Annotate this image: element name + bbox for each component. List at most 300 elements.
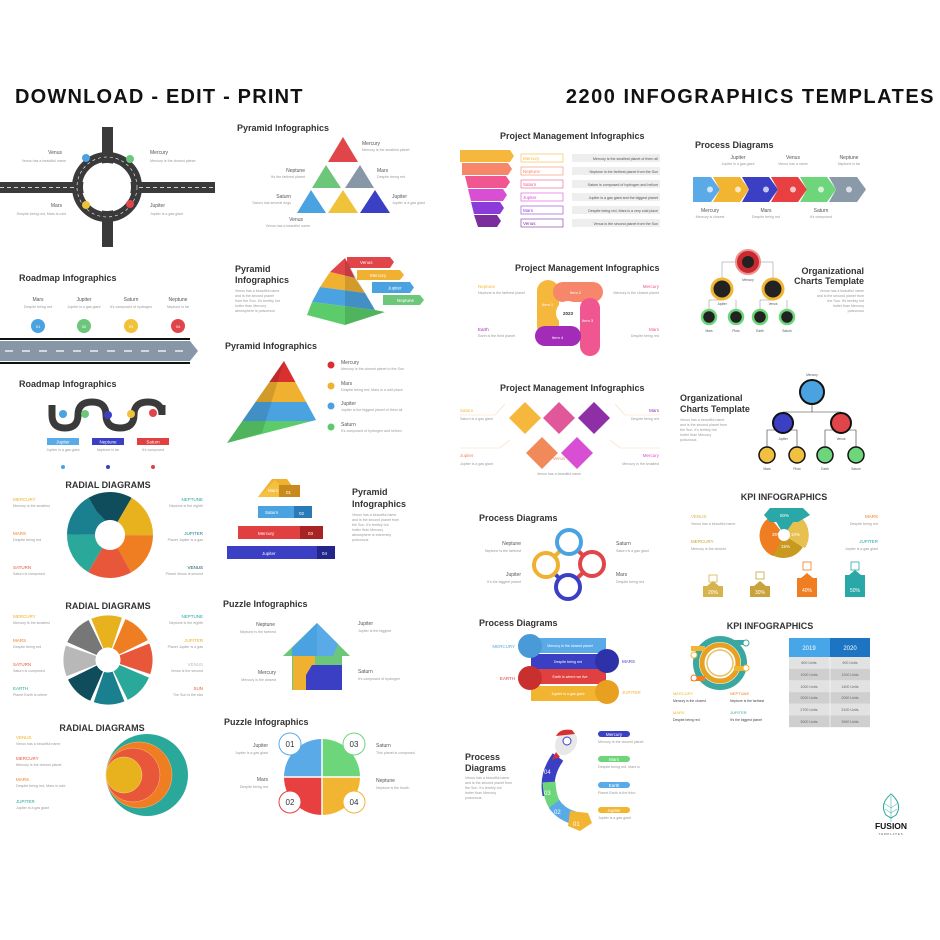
panel: pyramid ribbons stack: 01: [286, 490, 292, 495]
panel: radial diagram 2: Despite being red: [13, 645, 41, 649]
panel: roundabout: Mercury: [150, 150, 169, 156]
panel: KPI 2: 3900 Units: [841, 720, 859, 724]
panel: org chart 2: Saturn: [851, 467, 861, 471]
panel: roadmap 1: 04: [176, 324, 181, 329]
panel: KPI 2: 1400 Units: [841, 685, 859, 689]
panel: process rocket: Earth: [609, 783, 620, 788]
panel: radial diagram 1: NEPTUNE: [181, 497, 203, 502]
panel: puzzle circle: Despite being red: [240, 785, 268, 789]
panel: puzzle house: Mercury is the closest: [241, 678, 276, 682]
panel: pyramid 3D ribbons: from the Sun. It's terribly hot: [235, 299, 280, 303]
panel: org chart 2: Charts Template: [680, 404, 750, 414]
panel: pyramid ribbons stack: Infographics: [352, 499, 406, 509]
panel: org chart 2: Venus: [837, 437, 846, 441]
panel: project management funnel: Neptune: [523, 169, 541, 174]
panel: org chart 1: Pluto: [732, 329, 740, 333]
panel: puzzle house: Puzzle Infographics: [223, 599, 308, 609]
panel: radial diagram 1: Planet Venus is second: [166, 572, 203, 576]
panel: roadmap 1: Mars: [32, 297, 44, 303]
panel: KPI 1: 40%: [802, 588, 813, 594]
panel: puzzle house: It's composed of hydrogen: [358, 677, 400, 681]
panel: radial diagram 2: EARTH: [13, 686, 28, 691]
panel: process rocket: Jupiter: [607, 808, 621, 813]
panel: pyramid 3D ribbons: Jupiter: [388, 286, 402, 290]
panel: radial diagram 2: JUPITER: [184, 638, 204, 643]
panel: pyramid triangles: Saturn has several rings: [252, 201, 291, 205]
panel: project management loop: Despite being red: [631, 334, 659, 338]
panel: pyramid triangles: Jupiter: [392, 194, 407, 200]
panel: process bars: Jupiter is a gas giant: [552, 692, 584, 696]
panel: project management loop: Project Management Infographics: [515, 263, 660, 273]
panel: process rocket: the Sun. It's terribly hot: [465, 786, 502, 790]
panel: process rocket: Process: [465, 752, 500, 762]
panel: project management loop: Item 3: [582, 318, 594, 323]
panel: pyramid triangles: Venus has a beautiful name: [266, 224, 310, 228]
panel: puzzle circle: Jupiter is a gas giant: [235, 751, 268, 755]
panel: radial diagram 2: MERCURY: [13, 614, 36, 619]
panel: process bars: EARTH: [500, 676, 515, 681]
panel: project management funnel: Venus: [523, 221, 536, 226]
panel: process rocket: poisonous: [465, 796, 482, 800]
panel: radial diagram 2: Saturn is composed: [13, 669, 45, 673]
panel: roadmap 1: 03: [129, 324, 134, 329]
panel: roadmap 1: 01: [36, 324, 41, 329]
panel: org chart 2: Venus has a beautiful name: [680, 418, 724, 422]
panel: radial diagram 2: VENUS: [187, 662, 203, 667]
panel: puzzle circle: [224, 717, 415, 815]
panel: project management loop: Neptune is the farthest planet: [478, 291, 525, 295]
panel: pyramid 3D bands: Despite being red, Mars is a cold place: [341, 388, 403, 392]
panel: process rocket: Planet Earth is the third: [598, 791, 635, 795]
panel: org chart 1: the Sun. It's terribly hot: [827, 299, 864, 303]
panel: KPI 1: 20%: [708, 590, 719, 596]
panel: pyramid 3D bands: It's composed of hydrogen and helium: [341, 429, 402, 433]
panel: process circles: Jupiter: [506, 572, 521, 578]
panel: KPI 1: Jupiter is a gas giant: [845, 547, 878, 551]
panel: puzzle circle: 03: [350, 740, 359, 749]
panel: radial diagram 2: [13, 601, 204, 697]
panel: puzzle house: Neptune is the farthest: [240, 630, 276, 634]
panel: pyramid ribbons stack: Jupiter: [262, 551, 276, 556]
panel: roadmap 1: 02: [82, 324, 87, 329]
panel: pyramid 3D bands: [220, 341, 404, 446]
panel: pyramid ribbons stack: and is the second planet from: [352, 518, 399, 522]
panel: project management loop: Item 4: [552, 335, 564, 340]
panel: pyramid ribbons stack: atmosphere is extremely: [352, 533, 391, 537]
panel: pyramid triangles: Mars: [377, 168, 389, 174]
panel: roundabout: Jupiter is a gas giant: [150, 212, 183, 216]
panel: radial diagram 3: Venus has a beautiful name: [16, 742, 60, 746]
panel: roadmap 2: Roadmap Infographics: [19, 379, 117, 389]
panel: org chart 2: and is the second planet from: [680, 423, 727, 427]
panel: pyramid triangles: Mercury is the smallest planet: [362, 148, 410, 152]
panel: radial diagram 1: Planet Jupiter is a gas: [168, 538, 203, 542]
panel: process circles: Saturn is a gas giant: [616, 549, 649, 553]
panel: project management funnel: Jupiter is a gas giant and the biggest planet: [589, 196, 658, 200]
panel: pyramid 3D bands: Mercury is the closest planet to the Sun: [341, 367, 404, 371]
panel: radial diagram 2: Neptune is the eighth: [169, 621, 203, 625]
panel: pyramid ribbons stack: Mars: [268, 488, 279, 493]
panel: org chart 1: Saturn: [782, 329, 792, 333]
panel: KPI 2: 3000 Units: [800, 720, 818, 724]
panel: KPI 1: JUPITER: [859, 539, 879, 544]
panel: process circles: Neptune: [502, 541, 521, 547]
panel: KPI 2: 1000 Units: [800, 685, 818, 689]
panel: org chart 2: Jupiter: [778, 437, 789, 441]
panel: project management funnel: Mercury: [523, 156, 540, 161]
panel: org chart 2: the Sun. It's terribly hot: [680, 428, 717, 432]
panel: process rocket: [465, 727, 644, 831]
panel: radial diagram 2: MARS: [13, 638, 26, 643]
panel: pyramid ribbons stack: 04: [322, 551, 328, 556]
panel: org chart 1: Earth: [756, 329, 764, 333]
panel: KPI 1: Venus has a beautiful name: [691, 522, 735, 526]
panel: pyramid 3D bands: Pyramid Infographics: [225, 341, 317, 351]
panel: roadmap 2: Jupiter: [56, 440, 70, 444]
panel: roundabout: Jupiter: [150, 203, 165, 209]
panel: process rocket: Mars: [609, 757, 620, 762]
panel: KPI 1: 35%: [772, 532, 781, 537]
panel: radial diagram 2: Planet Earth is where: [13, 693, 47, 697]
panel: puzzle circle: Saturn: [376, 743, 391, 749]
panel: process circles: Despite being red: [616, 580, 644, 584]
panel: roadmap 1: Neptune: [169, 297, 188, 303]
header: right: 2200 INFOGRAPHICS TEMPLATES: [566, 86, 935, 108]
panel: project management loop: Mercury: [643, 284, 660, 289]
panel: pyramid triangles: Mercury: [362, 141, 381, 147]
panel: pyramid triangles: Saturn: [276, 194, 291, 200]
panel: pyramid 3D ribbons: Venus: [360, 260, 373, 265]
panel: roundabout: Venus: [48, 150, 62, 156]
panel: KPI 1: Mercury is the closest: [691, 547, 726, 551]
panel: roundabout: Mercury is the closest planet: [150, 159, 196, 163]
panel: project management diamonds: Saturn is a gas giant: [460, 417, 493, 421]
panel: pyramid ribbons stack: 03: [308, 531, 314, 536]
panel: pyramid triangles: Neptune: [286, 168, 305, 174]
panel: radial diagram 2: Venus is the second: [171, 669, 203, 673]
panel: KPI 1: 30%: [755, 590, 766, 596]
panel: process arrows: Neptune is far: [838, 162, 861, 166]
panel: pyramid ribbons stack: hotter than Mercury: [352, 528, 383, 532]
panel: pyramid 3D bands: Jupiter: [341, 401, 356, 407]
panel: puzzle house: Neptune: [256, 622, 275, 628]
panel: radial diagram 3: Mercury is the closest planet: [16, 763, 62, 767]
panel: project management funnel: Mercury is the smallest planet of them all: [593, 157, 658, 161]
panel: radial diagram 3: VENUS: [16, 735, 32, 740]
panel: process rocket: Mercury is the closest planet: [598, 740, 644, 744]
panel: org chart 1: Jupiter: [717, 302, 728, 306]
panel: KPI 2: JUPITER: [730, 710, 747, 715]
panel: pyramid 3D ribbons: hotter than Mercury: [235, 304, 266, 308]
panel: KPI 1: MERCURY: [691, 539, 714, 544]
panel: roadmap 1: Neptune is far: [167, 305, 190, 309]
panel: process rocket: Diagrams: [465, 763, 506, 773]
panel: puzzle circle: Neptune: [376, 778, 395, 784]
panel: pyramid 3D ribbons: and is the second planet: [235, 294, 274, 298]
panel: project management loop: Mercury is the closest planet: [613, 291, 659, 295]
panel: radial diagram 3: [16, 723, 188, 816]
panel: pyramid 3D ribbons: atmosphere is poisonous: [235, 309, 275, 313]
panel: process bars: Process Diagrams: [479, 618, 558, 628]
panel: process arrows: Process Diagrams: [695, 140, 774, 150]
panel: project management diamonds: Venus has a beautiful name: [537, 472, 581, 476]
logo: fusion templates: [875, 794, 907, 836]
panel: pyramid ribbons stack: Venus has a beautiful name: [352, 513, 396, 517]
panel: org chart 2: Earth: [821, 467, 829, 471]
panel: process bars: MARS: [622, 659, 635, 664]
panel: process circles: [479, 513, 649, 599]
panel: project management loop: Item 1: [542, 302, 554, 307]
panel: puzzle circle: 04: [350, 798, 359, 807]
panel: process arrows: Saturn: [814, 208, 829, 214]
panel: process rocket: 01: [573, 822, 580, 828]
panel: radial diagram 2: RADIAL DIAGRAMS: [65, 601, 151, 611]
panel: pyramid 3D ribbons: [235, 257, 424, 325]
panel: roadmap 2: It's composed: [142, 448, 164, 452]
panel: process arrows: Venus: [786, 155, 800, 161]
panel: process bars: MERCURY: [492, 644, 515, 649]
panel: radial diagram 3: Jupiter is a gas giant: [16, 806, 49, 810]
panel: project management loop: 2023: [563, 311, 574, 316]
panel: project management diamonds: Despite being red: [631, 417, 659, 421]
panel: project management funnel: Saturn: [523, 182, 537, 187]
panel: KPI 2: Neptune is the farthest: [730, 699, 764, 703]
panel: process circles: Process Diagrams: [479, 513, 558, 523]
panel: roundabout: Venus has a beautiful name: [22, 159, 66, 163]
panel: pyramid 3D bands: Mercury: [341, 360, 360, 366]
panel: radial diagram 1: MERCURY: [13, 497, 36, 502]
panel: radial diagram 3: Despite being red, Mars is cold: [16, 784, 65, 788]
panel: radial diagram 1: JUPITER: [184, 531, 204, 536]
panel: KPI 2: It's the biggest planet: [730, 718, 762, 722]
panel: project management funnel: Despite being red, Mars is a very cold place: [588, 209, 658, 213]
panel: puzzle circle: Puzzle Infographics: [224, 717, 309, 727]
panel: radial diagram 1: MARS: [13, 531, 26, 536]
panel: roundabout: [0, 127, 215, 247]
panel: project management diamonds: Jupiter is a gas giant: [460, 462, 493, 466]
panel: roadmap 1: Jupiter is a gas giant: [68, 305, 100, 309]
panel: KPI 1: KPI INFOGRAPHICS: [741, 492, 827, 502]
panel: org chart 1: hotter than Mercury: [833, 304, 864, 308]
panel: pyramid 3D ribbons: Pyramid: [235, 264, 271, 274]
panel: org chart 1: Venus: [769, 302, 778, 306]
panel: process arrows: It's composed: [810, 215, 832, 219]
panel: radial diagram 1: Despite being red: [13, 538, 41, 542]
panel: org chart 1: Charts Template: [794, 276, 864, 286]
panel: process rocket: and is the second planet from: [465, 781, 512, 785]
panel: process arrows: [693, 140, 866, 219]
panel: radial diagram 1: SATURN: [13, 565, 31, 570]
panel: puzzle house: Mercury: [258, 670, 276, 676]
panel: org chart 2: [680, 373, 864, 471]
panel: org chart 2: hotter than Mercury: [680, 433, 711, 437]
panel: roadmap 1: Despite being red: [24, 305, 52, 309]
panel: radial diagram 2: The Sun is the star: [173, 693, 204, 697]
panel: pyramid triangles: Despite being red: [377, 175, 405, 179]
panel: pyramid 3D ribbons: Venus has a beautiful name: [235, 289, 279, 293]
panel: process bars: [479, 618, 642, 704]
panel: project management diamonds: Mercury: [643, 453, 660, 458]
panel: project management diamonds: [460, 383, 660, 476]
panel: process arrows: Mercury is closest: [696, 215, 724, 219]
panel: pyramid triangles: Pyramid Infographics: [237, 123, 329, 133]
panel: org chart 2: Mercury: [806, 373, 818, 377]
panel: process rocket: 02: [554, 810, 561, 816]
panel: KPI 2: Mercury is the closest: [673, 699, 706, 703]
panel: roadmap 1: It's composed of hydrogen: [110, 305, 152, 309]
panel: project management funnel: Mars: [523, 208, 534, 213]
panel: project management funnel: Saturn is composed of hydrogen and helium: [588, 183, 658, 187]
panel: process arrows: Neptune: [840, 155, 859, 161]
panel: project management funnel: Jupiter: [523, 195, 537, 200]
panel: radial diagram 2: Mercury is the smallest: [13, 621, 50, 625]
panel: KPI 1: 10%: [791, 532, 800, 537]
panel: org chart 2: Organizational: [680, 393, 743, 403]
panel: KPI 1: 50%: [850, 588, 861, 594]
panel: pyramid ribbons stack: 02: [299, 511, 305, 516]
panel: puzzle circle: Jupiter: [253, 743, 268, 749]
panel: KPI 1: MARS: [865, 514, 878, 519]
panel: radial diagram 1: [13, 480, 204, 576]
panel: puzzle house: Jupiter: [358, 621, 373, 627]
panel: process rocket: Despite being red, Mars is: [598, 765, 640, 769]
panel: org chart 1: Organizational: [801, 266, 864, 276]
panel: process bars: Despite being red: [554, 660, 582, 664]
panel: roadmap 1: Roadmap Infographics: [19, 273, 117, 283]
panel: project management diamonds: Project Management Infographics: [500, 383, 645, 393]
panel: puzzle circle: Mars: [257, 777, 268, 783]
panel: org chart 1: and is the second planet from: [817, 294, 864, 298]
panel: project management loop: Neptune: [478, 284, 496, 289]
panel: roadmap 2: [19, 379, 169, 469]
panel: roadmap 2: Neptune: [99, 440, 117, 444]
panel: process rocket: hotter than Mercury: [465, 791, 496, 795]
panel: radial diagram 2: SATURN: [13, 662, 31, 667]
panel: radial diagram 3: MERCURY: [16, 756, 39, 761]
panel: project management loop: Item 2: [570, 290, 582, 295]
panel: org chart 2: poisonous: [680, 438, 697, 442]
panel: KPI 2: 2700 Units: [800, 708, 818, 712]
panel: KPI 2: MARS: [673, 710, 685, 715]
panel: radial diagram 3: RADIAL DIAGRAMS: [59, 723, 145, 733]
panel: process circles: Mars: [616, 572, 628, 578]
panel: process arrows: Jupiter: [730, 155, 746, 161]
panel: pyramid ribbons stack: poisonous: [352, 538, 369, 542]
panel: KPI 2: KPI INFOGRAPHICS: [727, 621, 813, 631]
panel: KPI 1: [691, 492, 879, 597]
panel: KPI 2: 3100 Units: [841, 708, 859, 712]
header: left: DOWNLOAD - EDIT - PRINT: [15, 86, 304, 108]
panel: radial diagram 1: VENUS: [187, 565, 203, 570]
panel: process circles: Neptune is the farthest: [485, 549, 521, 553]
panel: KPI 2: 800 Units: [801, 661, 817, 665]
panel: KPI 1: Despite being red: [850, 522, 878, 526]
panel: project management funnel: Neptune is the farthest planet from the Sun: [589, 170, 658, 174]
panel: process rocket: 03: [544, 791, 551, 797]
panel: radial diagram 1: Mercury is the smallest: [13, 504, 50, 508]
panel: KPI 1: 50%: [780, 513, 789, 518]
panel: KPI 2: MERCURY: [673, 691, 693, 696]
panel: KPI 1: VENUS: [691, 514, 707, 519]
panel: process circles: Saturn: [616, 541, 631, 547]
panel: org chart 1: [702, 250, 864, 333]
panel: roadmap 2: Jupiter is a gas giant: [47, 448, 79, 452]
panel: radial diagram 1: RADIAL DIAGRAMS: [65, 480, 151, 490]
panel: puzzle circle: Neptune is the fourth: [376, 786, 409, 790]
panel: pyramid 3D bands: Mars: [341, 381, 353, 387]
panel: radial diagram 2: SUN: [193, 686, 203, 691]
panel: roundabout: Mars: [51, 203, 62, 209]
panel: project management funnel: Project Management Infographics: [500, 131, 645, 141]
logo: fusion templates: FUSION: [875, 821, 907, 831]
panel: puzzle circle: 02: [286, 798, 295, 807]
logo: fusion templates: TEMPLATES: [879, 832, 903, 836]
panel: pyramid triangles: Venus: [289, 217, 303, 223]
panel: process rocket: Mercury: [606, 732, 623, 737]
panel: project management loop: Earth: [478, 327, 489, 332]
panel: KPI 2: 2000 Units: [841, 696, 859, 700]
panel: project management diamonds: Mercury is the smallest: [622, 462, 659, 466]
panel: roadmap 2: Neptune is far: [97, 448, 120, 452]
panel: project management diamonds: Mars: [649, 408, 660, 413]
panel: project management funnel: Venus is the second planet from the Sun: [593, 222, 658, 226]
panel: process bars: JUPITER: [622, 690, 642, 695]
panel: project management loop: Mars: [649, 327, 660, 332]
panel: puzzle circle: 01: [286, 740, 295, 749]
panel: pyramid ribbons stack: Saturn: [265, 510, 279, 515]
panel: pyramid triangles: [237, 123, 425, 228]
panel: pyramid 3D bands: Saturn: [341, 422, 356, 428]
panel: project management diamonds: Saturn: [460, 408, 474, 413]
panel: pyramid ribbons stack: [227, 479, 406, 559]
panel: radial diagram 3: MARS: [16, 777, 29, 782]
panel: pyramid ribbons stack: Mercury: [258, 531, 275, 536]
panel: KPI 1: 15%: [781, 544, 790, 549]
panel: process rocket: 04: [544, 770, 551, 776]
panel: KPI 2: 2020: [843, 646, 857, 652]
panel: project management loop: Earth is the third planet: [478, 334, 515, 338]
panel: pyramid ribbons stack: Pyramid: [352, 487, 388, 497]
panel: process arrows: Jupiter is a gas giant: [722, 162, 754, 166]
panel: pyramid 3D ribbons: Neptune: [397, 298, 415, 303]
panel: radial diagram 2: NEPTUNE: [181, 614, 203, 619]
panel: pyramid ribbons stack: the Sun. It's terribly hot: [352, 523, 389, 527]
panel: KPI 2: 1000 Units: [800, 673, 818, 677]
panel: roadmap 1: Saturn: [124, 297, 139, 303]
panel: KPI 2: NEPTUNE: [730, 691, 749, 696]
panel: project management diamonds: Venus: [553, 456, 566, 461]
panel: KPI 2: 900 Units: [842, 661, 858, 665]
panel: org chart 1: poisonous: [848, 309, 864, 313]
panel: radial diagram 1: Neptune is the eighth: [169, 504, 203, 508]
panel: process arrows: Mercury: [701, 208, 720, 214]
panel: org chart 2: Mars: [763, 467, 771, 471]
panel: process bars: Earth is where we live: [553, 675, 587, 679]
panel: process arrows: Despite being red: [752, 215, 780, 219]
panel: project management loop: [478, 263, 660, 356]
panel: KPI 2: 2000 Units: [800, 696, 818, 700]
panel: process rocket: Venus has a beautiful name: [465, 776, 509, 780]
panel: puzzle house: Saturn: [358, 669, 373, 675]
panel: process circles: It's the biggest planet: [487, 580, 521, 584]
panel: roadmap 2: Saturn: [146, 440, 160, 444]
panel: puzzle house: [223, 599, 400, 690]
panel: org chart 1: Mercury: [742, 278, 754, 282]
panel: puzzle house: Jupiter is the biggest: [358, 629, 391, 633]
panel: pyramid triangles: It's the farthest planet: [271, 175, 305, 179]
panel: project management diamonds: Jupiter: [460, 453, 474, 458]
panel: process arrows: Mars: [760, 208, 772, 214]
